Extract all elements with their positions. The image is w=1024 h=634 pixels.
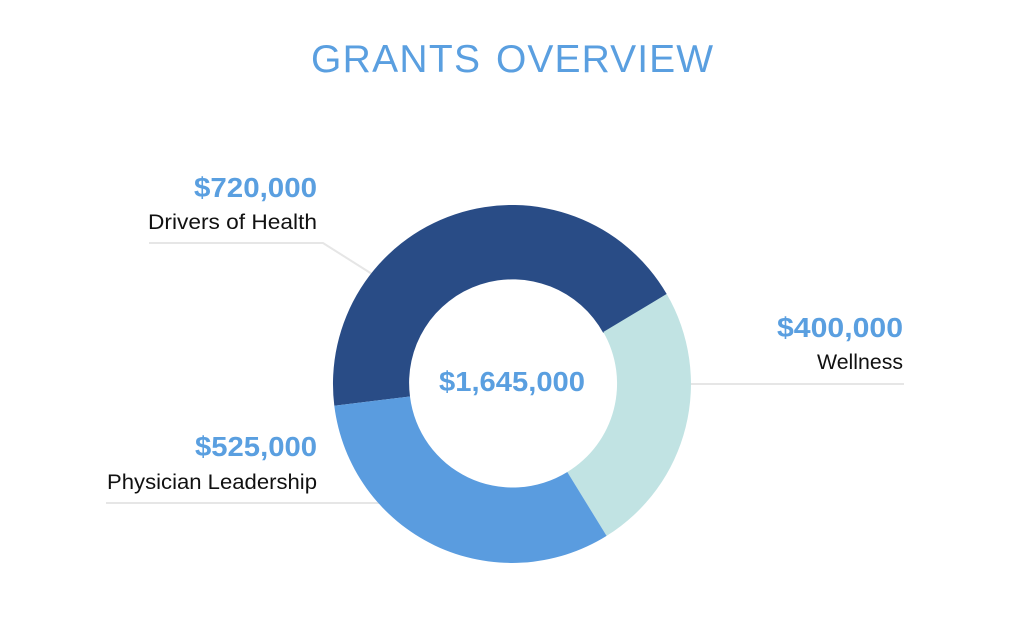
leader line: Drivers of Health bbox=[149, 243, 372, 274]
segment: Physician Leadership bbox=[334, 396, 607, 563]
label: Drivers of Health: Drivers of Health bbox=[148, 211, 317, 234]
label: Drivers of Health bbox=[148, 172, 317, 234]
label: Wellness bbox=[777, 312, 903, 374]
donut chart bbox=[333, 205, 691, 563]
segment: Wellness bbox=[567, 294, 691, 536]
title: GRANTS bbox=[311, 38, 480, 81]
label: Physician Leadership: $525,000 bbox=[195, 431, 317, 462]
title: OVERVIEW bbox=[496, 38, 713, 81]
total amount: $1,645,000 bbox=[439, 366, 585, 397]
label: Drivers of Health: $720,000 bbox=[194, 172, 317, 203]
label: Physician Leadership: Physician Leadership bbox=[107, 471, 317, 494]
label: Wellness: $400,000 bbox=[777, 312, 903, 343]
title bbox=[311, 38, 713, 81]
leader line: Physician Leadership bbox=[106, 502, 382, 504]
segment: Drivers of Health bbox=[333, 205, 667, 406]
label: Wellness: Wellness bbox=[817, 351, 903, 374]
label: Physician Leadership bbox=[107, 431, 317, 494]
leader line: Wellness bbox=[688, 383, 904, 385]
